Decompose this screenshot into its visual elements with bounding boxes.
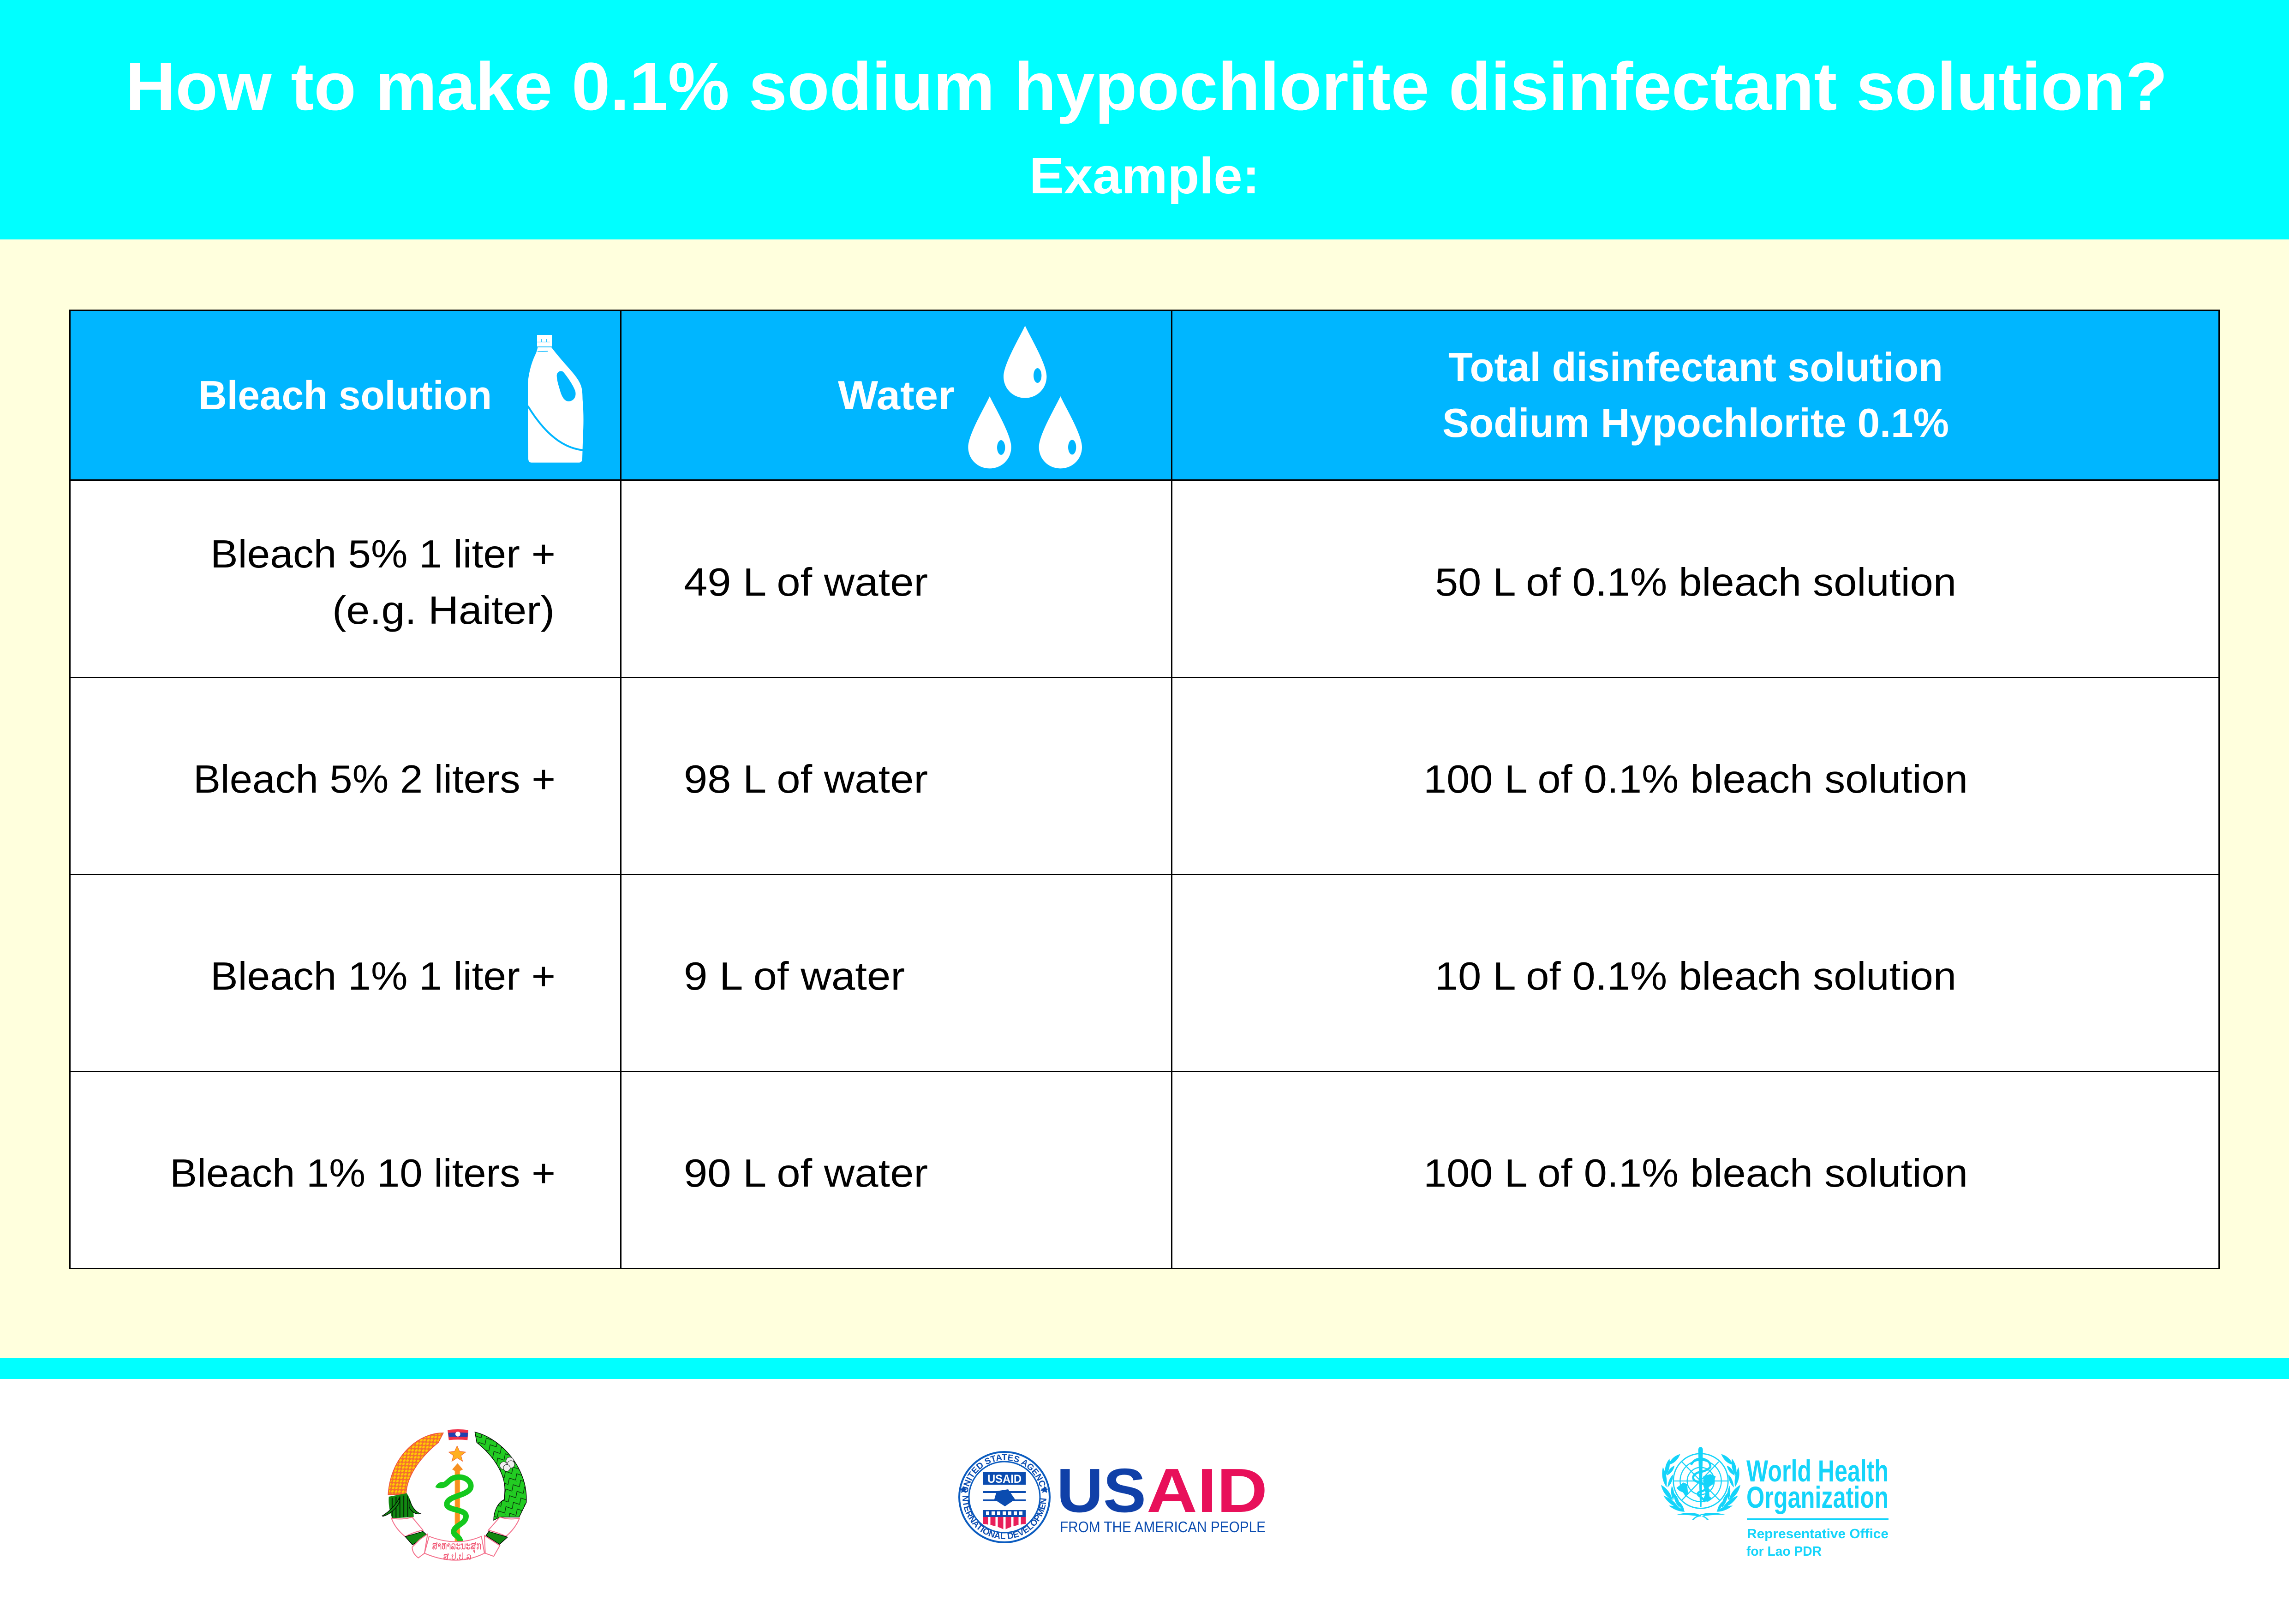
row 2: 100 L of 0.1% bleach solution: [1423, 758, 1968, 801]
logo: World Health Organization: [1661, 1447, 1889, 1559]
WHO office line: Representative Office: [1747, 1527, 1889, 1541]
subtitle: Example:: [1029, 148, 1260, 204]
WHO name: Organization: [1746, 1480, 1889, 1514]
WHO office line: [1746, 1527, 1889, 1559]
emblem rod and serpent: [435, 1463, 471, 1542]
row 3: [210, 955, 1956, 998]
emblem green leaf sheaf: [475, 1432, 526, 1520]
footer band: [0, 1358, 2289, 1379]
row 1: Bleach 5% 1 liter +: [210, 532, 556, 576]
icon: bleach bottle: [528, 335, 584, 463]
emblem side ribbons: [391, 1517, 520, 1537]
USAID seal: UNITED STATES AGENCY: [960, 1453, 1049, 1494]
heading: bleach solution: Bleach solution: [198, 372, 492, 418]
emblem bottom banner: ສ.ປ.ປ.ລ: [443, 1551, 472, 1562]
row 1: (e.g. Haiter): [332, 589, 555, 633]
table: [69, 310, 2220, 1269]
background: cream panel: [0, 239, 2289, 1358]
header band: [0, 0, 2289, 239]
row 1: 49 L of water: [684, 561, 928, 604]
USAID wordmark: US: [1057, 1456, 1146, 1525]
emblem flag: [448, 1429, 468, 1440]
row 3: Bleach 1% 1 liter +: [210, 955, 556, 998]
globe: [1673, 1454, 1728, 1508]
emblem bottom banner: [412, 1534, 500, 1562]
row 2: Bleach 5% 2 liters +: [193, 758, 556, 801]
WHO name: World Health: [1746, 1454, 1889, 1488]
row 3: 10 L of 0.1% bleach solution: [1435, 955, 1956, 998]
right laurel: [1716, 1454, 1740, 1512]
row 2: [193, 758, 1968, 801]
row 3: 9 L of water: [684, 955, 905, 998]
table grid lines: [69, 310, 2220, 1269]
emblem star: [449, 1446, 466, 1461]
row 2: 98 L of water: [684, 758, 928, 801]
USAID wordmark: AID: [1147, 1456, 1267, 1525]
WHO name: [1746, 1454, 1889, 1514]
heading: water: Water: [838, 372, 955, 418]
logo: USAID: [0, 0, 1267, 1542]
row 4: [170, 1152, 1968, 1195]
heading: total disinfectant solution: Total disinfectant solution: [1448, 344, 1943, 390]
USAID seal: INTERNATIONAL DEVELOPMENT: [0, 0, 1049, 1541]
icon: water drops: [968, 326, 1082, 468]
row 4: 90 L of water: [684, 1152, 928, 1195]
logo: Lao Ministry of Health emblem: [382, 1429, 526, 1562]
row 4: Bleach 1% 10 liters +: [170, 1152, 556, 1195]
emblem bottom banner: ສາທາລະນະສຸກ: [432, 1539, 481, 1553]
table header row: [69, 310, 2219, 480]
USAID tagline: FROM THE AMERICAN PEOPLE: [1060, 1518, 1266, 1535]
emblem green stems: [405, 1531, 508, 1545]
emblem rice sheaf: [382, 1433, 443, 1518]
USAID wordmark: [1057, 1456, 1267, 1525]
left laurel: [1661, 1454, 1685, 1512]
row 1: 50 L of 0.1% bleach solution: [1435, 561, 1956, 604]
continents: [1676, 1474, 1715, 1502]
row 1: [210, 532, 1956, 633]
USAID seal: USAID: [987, 1473, 1022, 1486]
heading: sodium hypochlorite: Sodium Hypochlorite 0.1%: [1442, 400, 1949, 446]
WHO emblem: [1661, 1447, 1740, 1520]
rod and serpent: [1691, 1447, 1710, 1507]
ribbon: [1676, 1513, 1726, 1520]
WHO office line: for Lao PDR: [1746, 1544, 1822, 1559]
row 4: 100 L of 0.1% bleach solution: [1423, 1152, 1968, 1195]
title: How to make 0.1% sodium hypochlorite disinfectant solution?: [126, 49, 2168, 125]
